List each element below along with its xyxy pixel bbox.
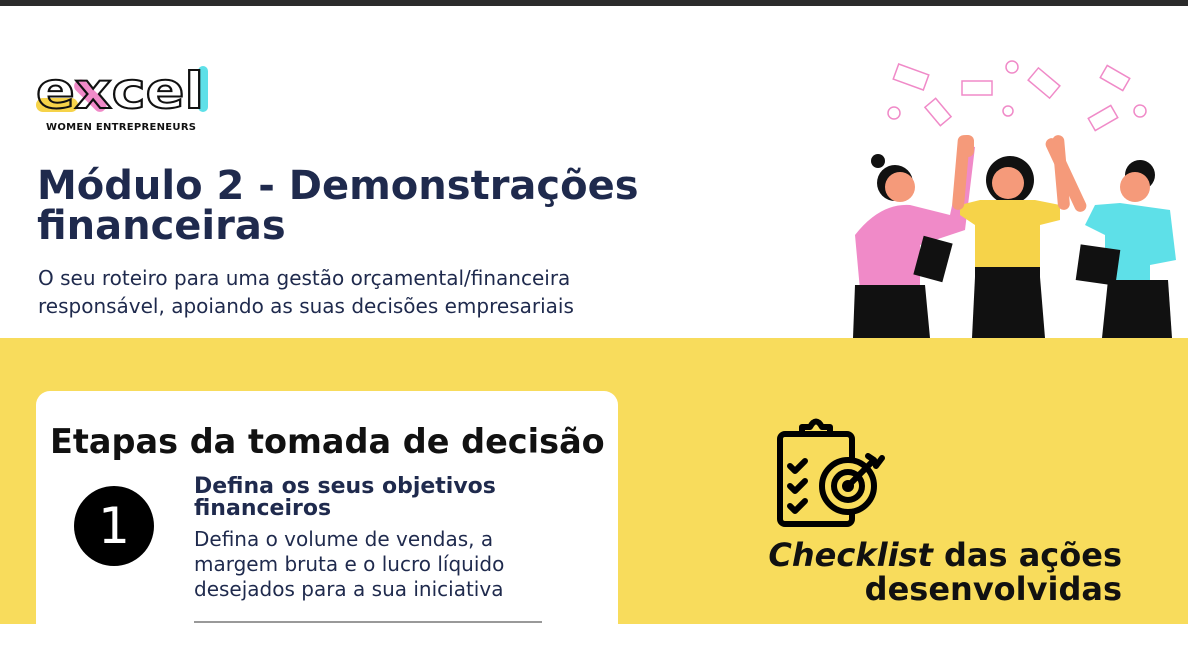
- step number 1: [74, 486, 154, 566]
- title: Módulo 2 - Demonstrações financeiras: [37, 163, 639, 249]
- logo: WOMEN ENTREPRENEURS: [46, 122, 196, 133]
- logo: excel: [36, 62, 204, 120]
- top bar: [0, 0, 1188, 6]
- logo: [36, 62, 208, 133]
- panel: decision steps card: [36, 391, 618, 651]
- step text: Defina o volume de vendas, a margem bruta e o lucro líquido desejados para a sua iniciativa: [194, 527, 504, 601]
- step text: [194, 474, 504, 601]
- illustration: three women high-fiving: [853, 60, 1176, 338]
- yellow section: [0, 338, 1188, 624]
- icon: clipboard with target: [777, 418, 885, 527]
- step number 1: 1: [98, 497, 130, 555]
- subtitle: O seu roteiro para uma gestão orçamental/financeira responsável, apoiando as suas decisões empresariais: [38, 266, 574, 318]
- checklist heading: Checklist das ações desenvolvidas: [768, 536, 1122, 608]
- step text: Defina os seus objetivos financeiros: [194, 474, 496, 521]
- card heading: Etapas da tomada de decisão: [50, 422, 605, 461]
